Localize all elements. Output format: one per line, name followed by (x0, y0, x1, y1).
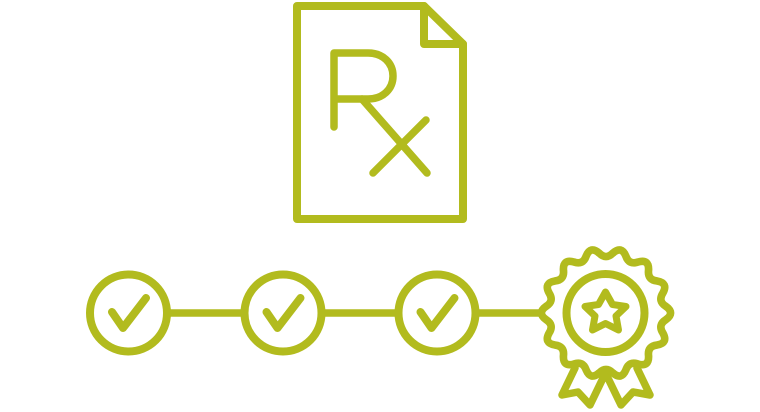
scalloped seal (541, 250, 671, 376)
icon: prescription document (297, 6, 463, 219)
star (585, 292, 626, 330)
step 3: check circle (398, 274, 476, 352)
icon: award badge (541, 250, 671, 405)
connector line between steps (168, 309, 540, 317)
ribbon tails (562, 368, 650, 405)
step 2: check circle (244, 274, 322, 352)
Rx symbol (334, 53, 427, 173)
document outline (297, 6, 463, 219)
step 1: check circle (90, 274, 167, 352)
folded corner (424, 6, 463, 44)
inner ring (566, 274, 644, 352)
